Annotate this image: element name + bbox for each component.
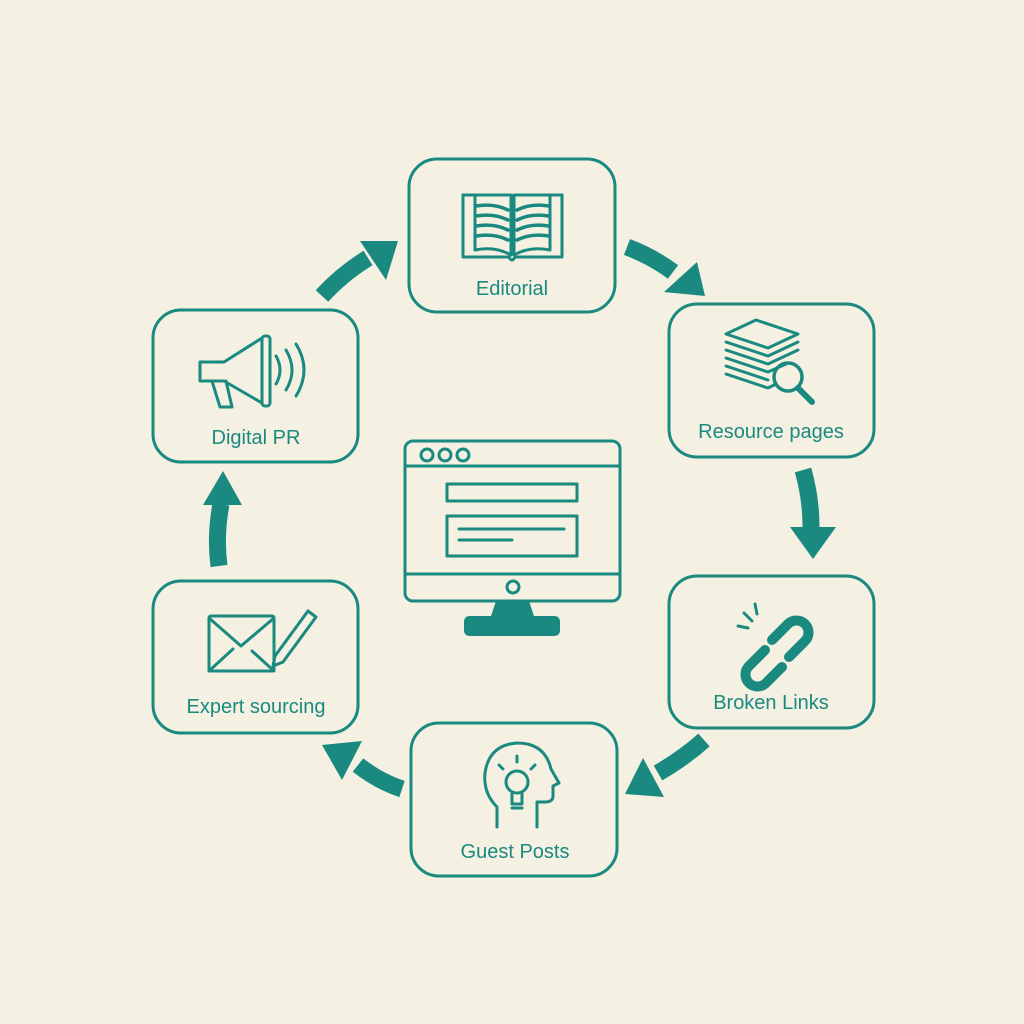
panel: Guest Posts <box>411 723 617 876</box>
icon: envelope with pen <box>209 611 316 671</box>
arrow: Resource pages to Broken Links <box>790 470 836 559</box>
panel: Digital PR <box>153 310 358 462</box>
arrow: Broken Links to Guest Posts <box>625 740 704 797</box>
panel: Expert sourcing <box>153 581 358 733</box>
panel: Editorial: Editorial <box>476 278 548 300</box>
arrow: Expert sourcing to Digital PR <box>203 471 242 566</box>
icon: megaphone <box>200 336 304 407</box>
panel: Expert sourcing: Expert sourcing <box>187 696 325 718</box>
panel: Resource pages <box>669 304 874 457</box>
icon: broken chain <box>738 604 809 687</box>
arrow: Guest Posts to Expert sourcing <box>322 741 402 789</box>
panel: Guest Posts: Guest Posts <box>461 841 569 863</box>
icon: open book <box>463 195 562 260</box>
arrow: Digital PR to Editorial <box>322 241 398 296</box>
panel: Resource pages: Resource pages <box>698 421 844 443</box>
icon: head with light bulb <box>485 743 559 827</box>
icon: stacked pages with magnifier <box>726 320 812 402</box>
panel: Digital PR: Digital PR <box>212 427 300 449</box>
panel: Broken Links <box>669 576 874 728</box>
monitor <box>405 441 620 636</box>
arrow: Editorial to Resource pages <box>627 247 705 296</box>
panel: Editorial <box>409 159 615 312</box>
panel: Broken Links: Broken Links <box>713 692 829 714</box>
